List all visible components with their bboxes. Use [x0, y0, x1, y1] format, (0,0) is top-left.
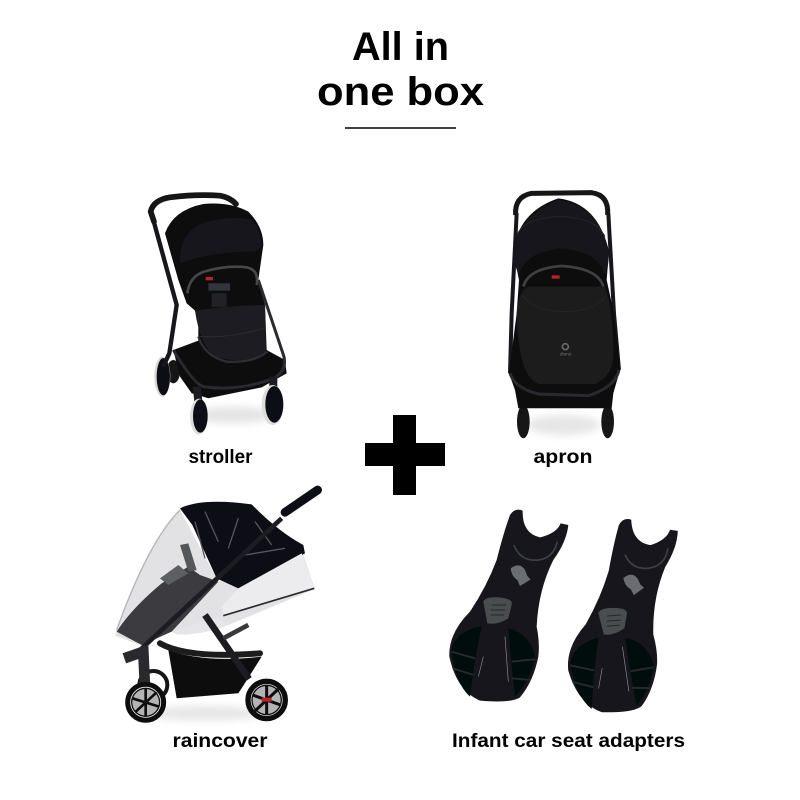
label: infant car seat adapters: Infant car seat adapters [452, 731, 685, 752]
icon: stroller with apron photo: diono [560, 352, 572, 357]
title: All in [352, 25, 449, 69]
icon: plus sign [365, 415, 445, 495]
title: one box [317, 70, 484, 114]
label: apron: apron [534, 447, 592, 468]
label: stroller: stroller [188, 447, 253, 468]
icon: stroller photo [151, 195, 287, 435]
title [317, 25, 484, 114]
icon: infant car seat adapters photo [449, 510, 690, 715]
label: raincover: raincover [172, 731, 268, 752]
icon: stroller with raincover photo [115, 490, 318, 721]
icon: stroller with apron photo [509, 193, 620, 438]
